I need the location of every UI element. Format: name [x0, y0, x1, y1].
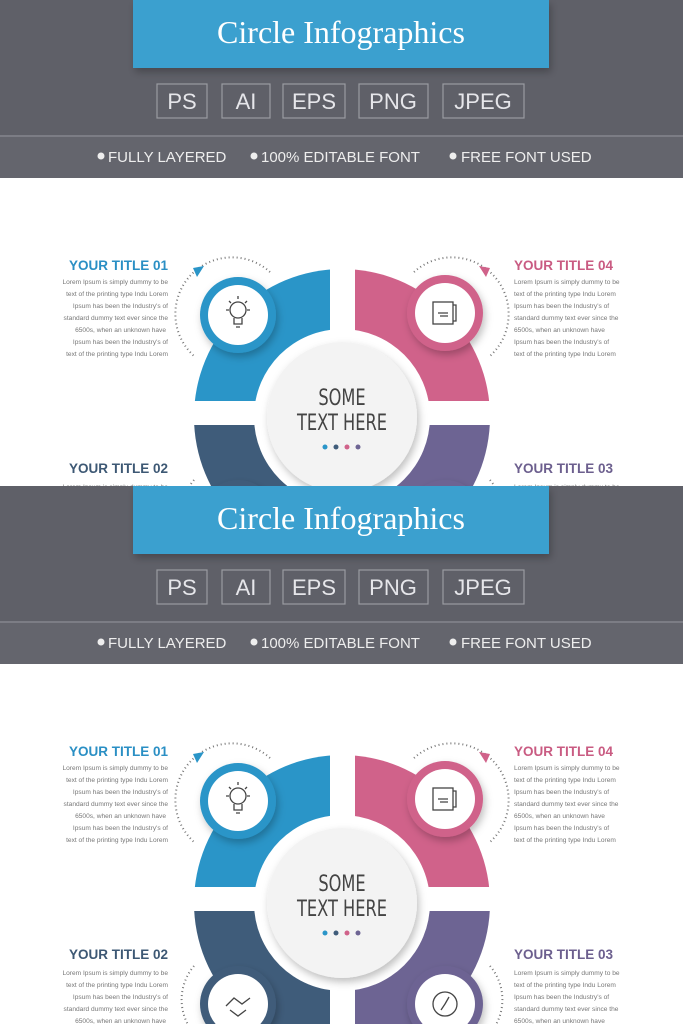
section: copy 1 (clipped)	[0, 0, 683, 486]
section: copy 2	[0, 486, 683, 1024]
